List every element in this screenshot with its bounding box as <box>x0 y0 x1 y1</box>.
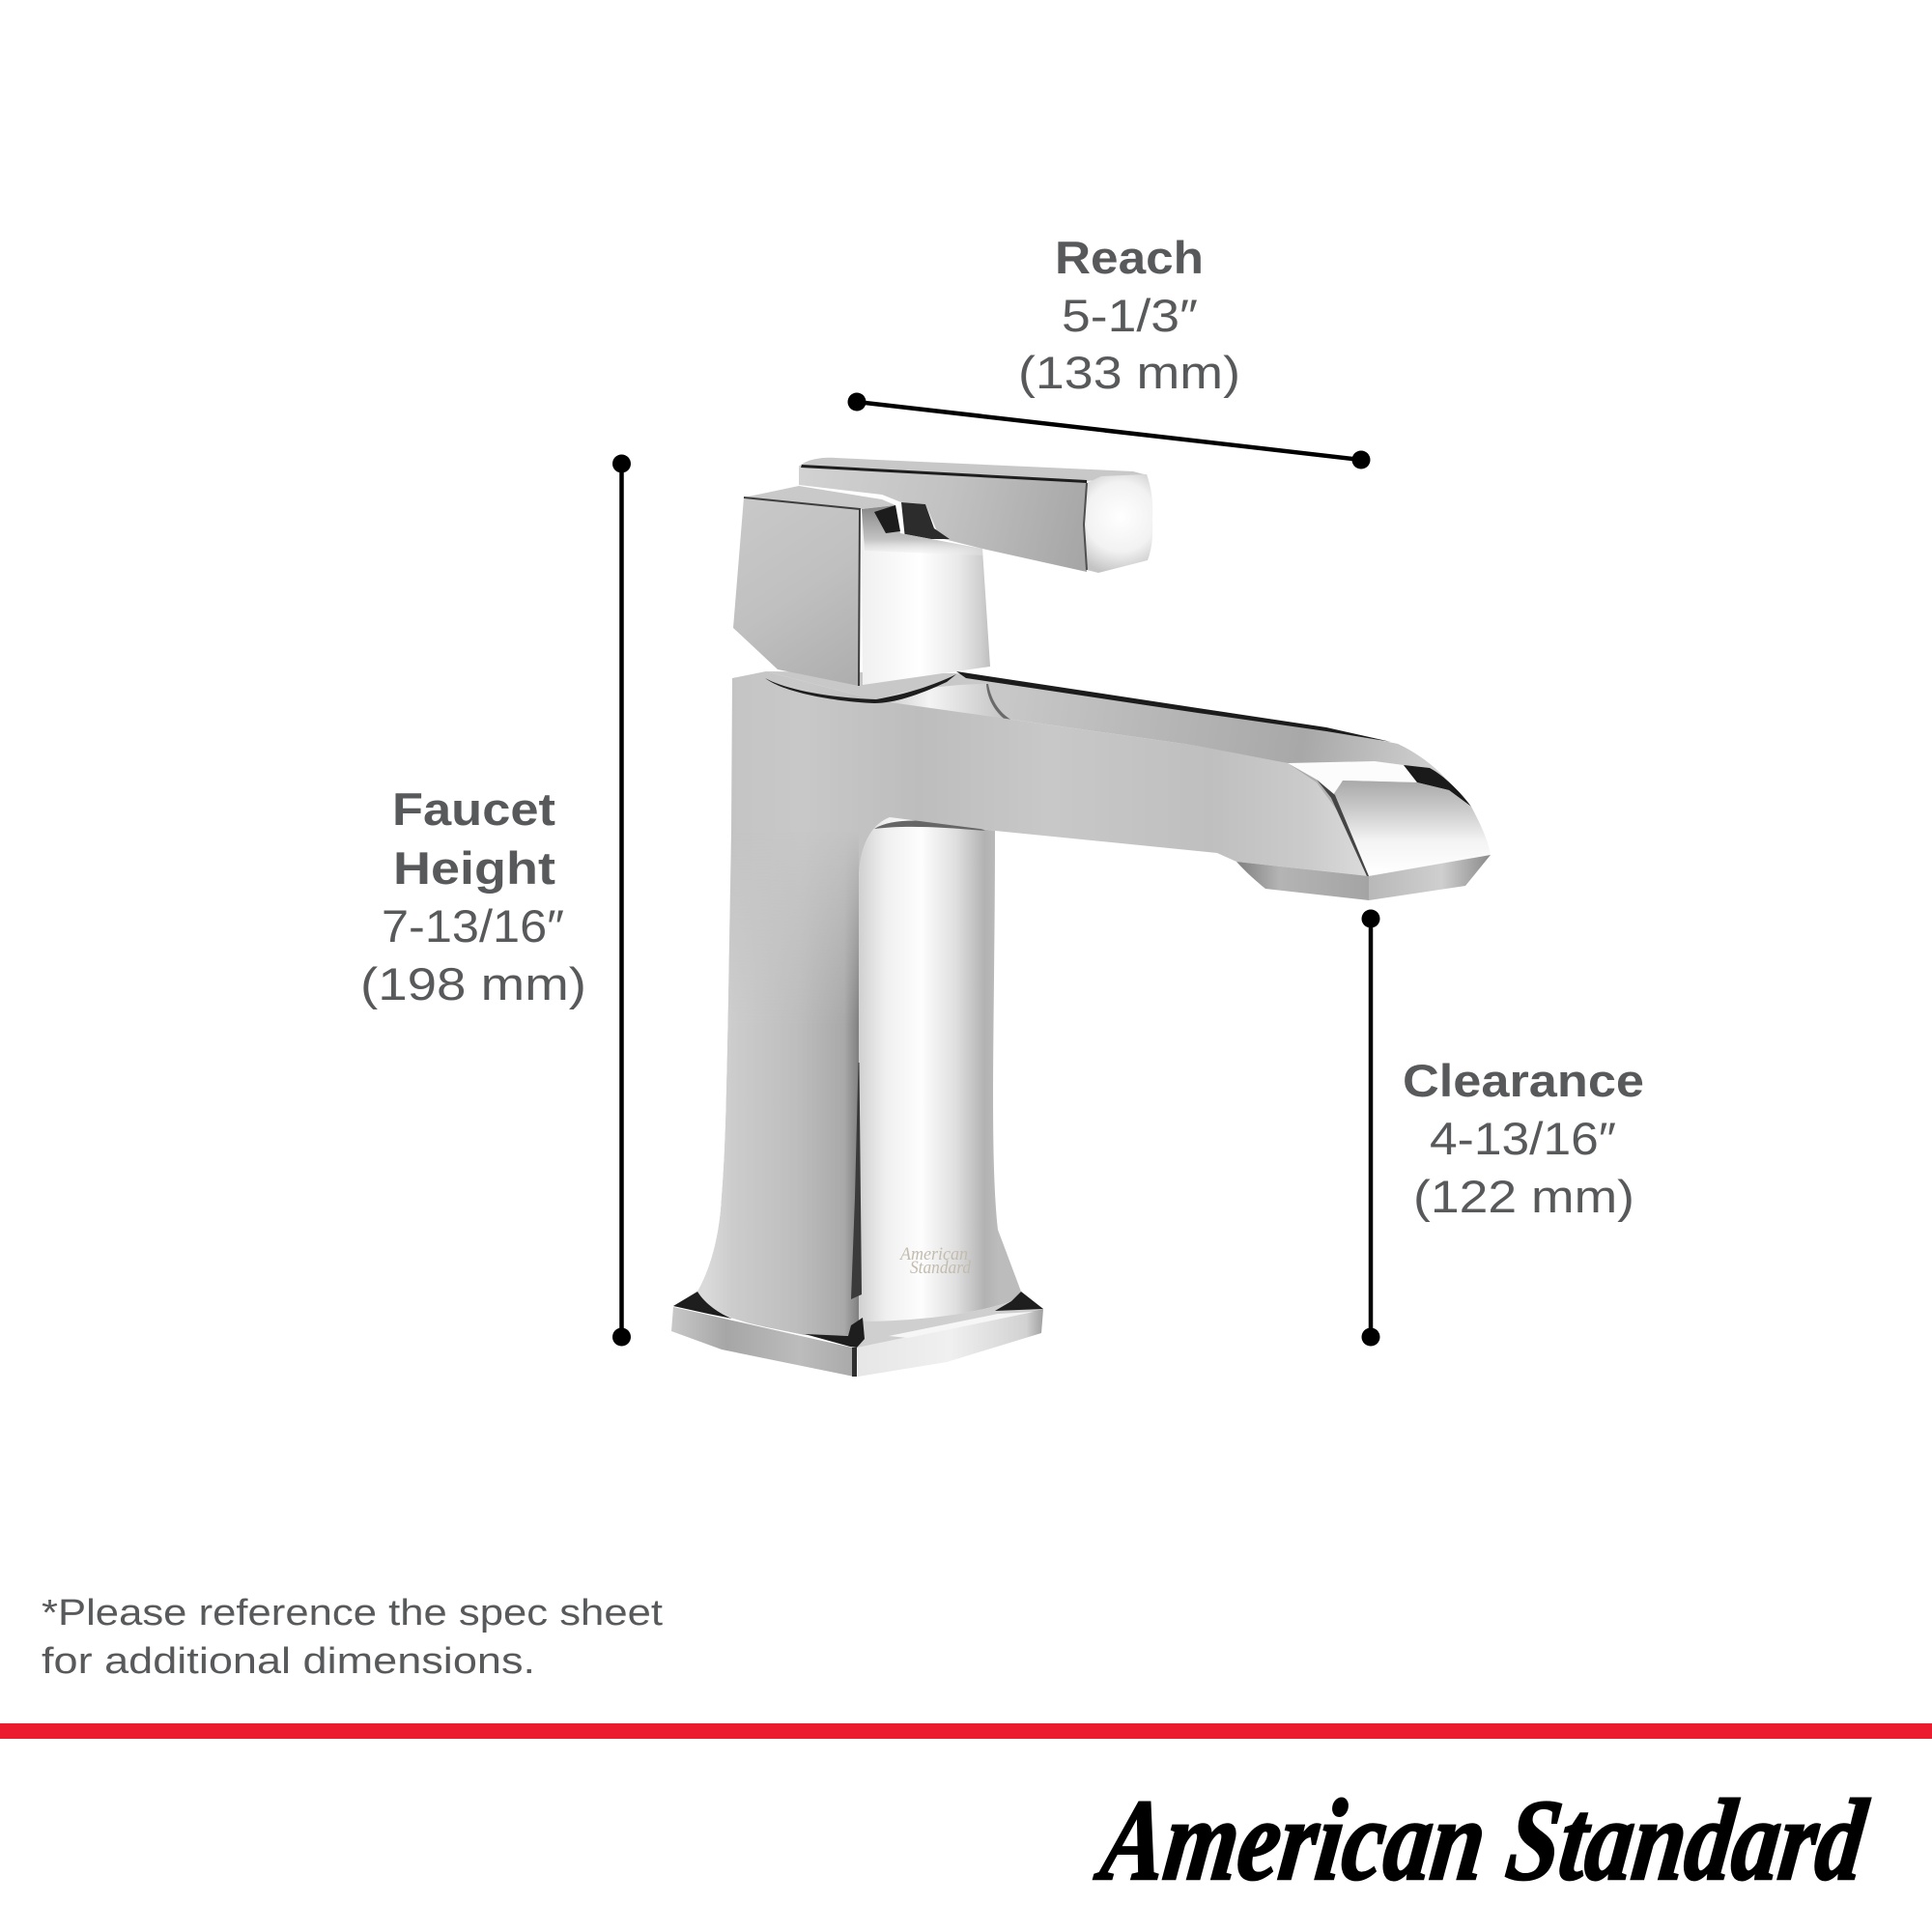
faucet: arch shadow <box>874 821 985 831</box>
red divider bar <box>0 1723 1932 1739</box>
faucet: handle right face reflection <box>862 505 983 555</box>
faucet illustration <box>671 458 1491 1377</box>
faucet: base right dark wedge <box>995 1292 1043 1311</box>
footnote: for additional dimensions. <box>42 1641 535 1682</box>
faucet: center seam <box>851 1063 862 1299</box>
clearance label: 4-13/16″ <box>1430 1113 1616 1164</box>
faucet: spout end window highlight <box>1288 761 1417 795</box>
faucet: right tip chamfer <box>1369 855 1491 900</box>
faucet: handle dark nook <box>874 505 900 533</box>
faucet height label: Height <box>393 842 555 894</box>
faucet: spout and upper body side <box>697 671 1369 1336</box>
faucet: top inner edge line <box>986 684 1288 763</box>
faucet height label: Faucet <box>392 783 555 835</box>
faucet: lever side <box>799 466 1087 572</box>
faucet height label: (198 mm) <box>360 958 586 1009</box>
faucet: base center dark <box>805 1318 865 1348</box>
reach label: 5-1/3″ <box>1062 290 1198 341</box>
reach label <box>1018 232 1240 398</box>
faucet: left tip chamfer <box>1236 862 1369 900</box>
clearance dimension line <box>1362 910 1379 1347</box>
faucet: lever cap edge <box>1084 483 1087 570</box>
faucet: base center seam <box>852 1348 857 1377</box>
faucet: base right top face <box>857 1292 1043 1348</box>
faucet height dimension line <box>612 454 631 1347</box>
faucet: end face edge <box>1317 780 1369 876</box>
reach dimension line <box>848 392 1370 469</box>
footnote: *Please reference the spec sheet <box>42 1593 664 1634</box>
faucet engraved logo: Standard <box>910 1258 971 1278</box>
faucet: left column shading <box>697 831 859 1336</box>
reach label: (133 mm) <box>1018 347 1240 398</box>
clearance label: Clearance <box>1403 1055 1644 1106</box>
faucet: base left lip <box>671 1307 854 1377</box>
clearance label: (122 mm) <box>1413 1171 1634 1222</box>
faucet engraved logo: American <box>898 1244 968 1264</box>
footnote <box>42 1593 664 1682</box>
faucet: lever end cap <box>1084 474 1152 573</box>
faucet: lever top dark line <box>801 465 1087 483</box>
faucet: dark crescent reflection <box>1404 765 1471 807</box>
faucet: base right lip <box>857 1309 1043 1377</box>
faucet: handle block front edge <box>744 497 860 686</box>
faucet: top inner highlight <box>876 684 1016 723</box>
faucet height label: 7-13/16″ <box>382 900 564 952</box>
faucet: lever nub <box>901 502 950 539</box>
faucet: handle block top <box>744 486 895 509</box>
faucet: neck ring dark <box>765 674 956 703</box>
faucet: spout top surface <box>766 671 1491 876</box>
faucet: base right top highlight <box>889 1312 1034 1338</box>
faucet: handle block right face <box>862 505 990 685</box>
faucet: lever top band <box>800 458 1148 481</box>
faucet engraved logo <box>898 1244 971 1278</box>
faucet: right column front <box>859 817 1021 1321</box>
faucet: spout end face <box>1335 781 1491 876</box>
faucet height label <box>360 783 586 1009</box>
faucet: handle block left face <box>733 497 860 686</box>
faucet: top rim dark line <box>956 671 1391 742</box>
reach label: Reach <box>1055 232 1204 283</box>
clearance label <box>1403 1055 1644 1222</box>
faucet: base left dark wedge <box>673 1292 732 1319</box>
